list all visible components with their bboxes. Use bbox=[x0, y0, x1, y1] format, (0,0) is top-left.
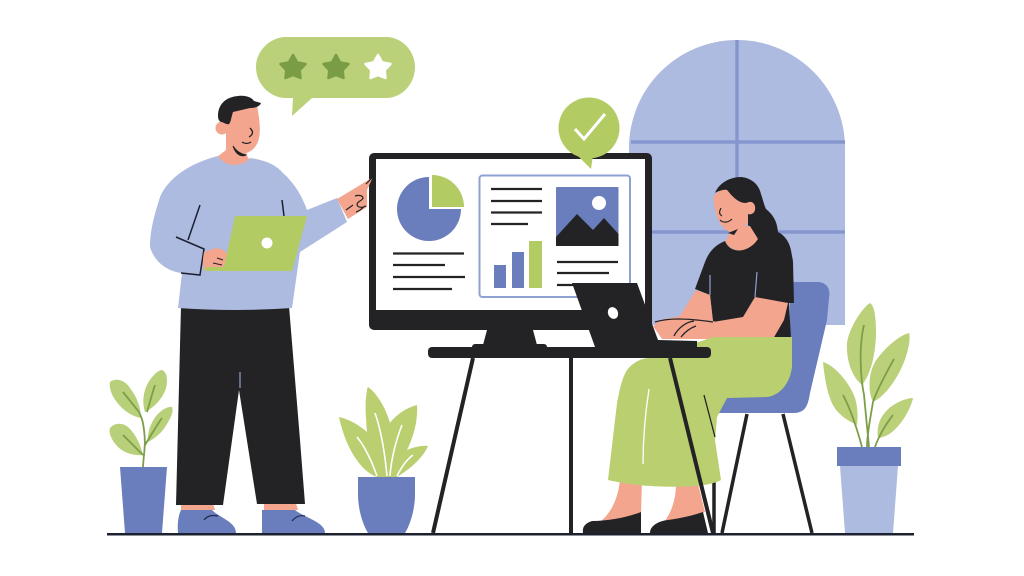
left plant pot bbox=[120, 467, 167, 533]
bar chart bbox=[494, 241, 542, 288]
woman's black laptop bbox=[572, 283, 697, 347]
skirt fold lines bbox=[643, 389, 649, 464]
man's ankles bbox=[181, 503, 298, 510]
hair bbox=[218, 96, 261, 124]
neck bbox=[725, 226, 758, 251]
woman's legs bbox=[600, 480, 705, 522]
man's pointing hand bbox=[337, 177, 373, 219]
sweater fold lines bbox=[176, 200, 284, 275]
monitor foot bbox=[472, 344, 547, 350]
speech bubble with star rating bbox=[256, 37, 415, 116]
report panel bbox=[480, 176, 630, 297]
arched window bbox=[629, 40, 845, 325]
ground line bbox=[107, 533, 914, 536]
face bbox=[714, 190, 755, 232]
right plant pot bbox=[840, 466, 898, 533]
woman sitting bbox=[583, 177, 794, 533]
ear bbox=[216, 122, 228, 134]
man's trousers bbox=[176, 306, 305, 505]
trouser seam bbox=[239, 372, 241, 388]
man's green laptop bbox=[205, 216, 307, 271]
man's neck and head bbox=[216, 96, 261, 167]
pie chart bbox=[397, 175, 464, 241]
desk bbox=[428, 344, 713, 533]
woman's neck and face bbox=[714, 190, 758, 251]
middle potted plant bbox=[339, 387, 428, 533]
chair legs bbox=[714, 414, 812, 533]
neck bbox=[217, 130, 250, 167]
facial features bbox=[242, 128, 252, 144]
face bbox=[226, 106, 260, 154]
check mark bubble bbox=[558, 98, 620, 169]
panel text lines bbox=[491, 189, 542, 224]
middle plant leaves bbox=[339, 387, 428, 477]
man's blue sweater bbox=[150, 156, 347, 310]
desk legs bbox=[433, 358, 713, 533]
right plant pot rim bbox=[837, 447, 901, 466]
star 3 bbox=[366, 55, 390, 78]
chair bbox=[714, 282, 829, 533]
left plant leaves bbox=[110, 370, 173, 467]
desktop monitor bbox=[369, 153, 652, 345]
woman's long hair bbox=[715, 177, 792, 285]
monitor screen bbox=[376, 159, 645, 310]
woman's green skirt bbox=[608, 337, 792, 487]
facial features bbox=[720, 208, 732, 222]
monitor bezel bbox=[369, 153, 652, 330]
top fold highlights bbox=[710, 272, 757, 297]
star 1 bbox=[280, 55, 306, 78]
woman's black top bbox=[695, 236, 794, 338]
image thumbnail bbox=[556, 187, 618, 246]
star 2 bbox=[324, 55, 348, 78]
left text lines bbox=[393, 254, 465, 289]
chair seat and back bbox=[718, 282, 829, 413]
monitor stand bbox=[483, 330, 537, 345]
desk top bbox=[428, 347, 711, 358]
man's hand on laptop bbox=[203, 248, 228, 270]
left potted plant bbox=[110, 370, 173, 533]
man standing bbox=[150, 96, 373, 533]
woman's arms and hands bbox=[653, 290, 788, 339]
right potted plant bbox=[823, 303, 913, 533]
woman's shoes bbox=[583, 512, 708, 533]
man's shoes bbox=[178, 510, 325, 533]
middle plant pot bbox=[358, 477, 415, 533]
right plant leaves bbox=[823, 303, 913, 447]
panel caption lines bbox=[557, 262, 618, 285]
